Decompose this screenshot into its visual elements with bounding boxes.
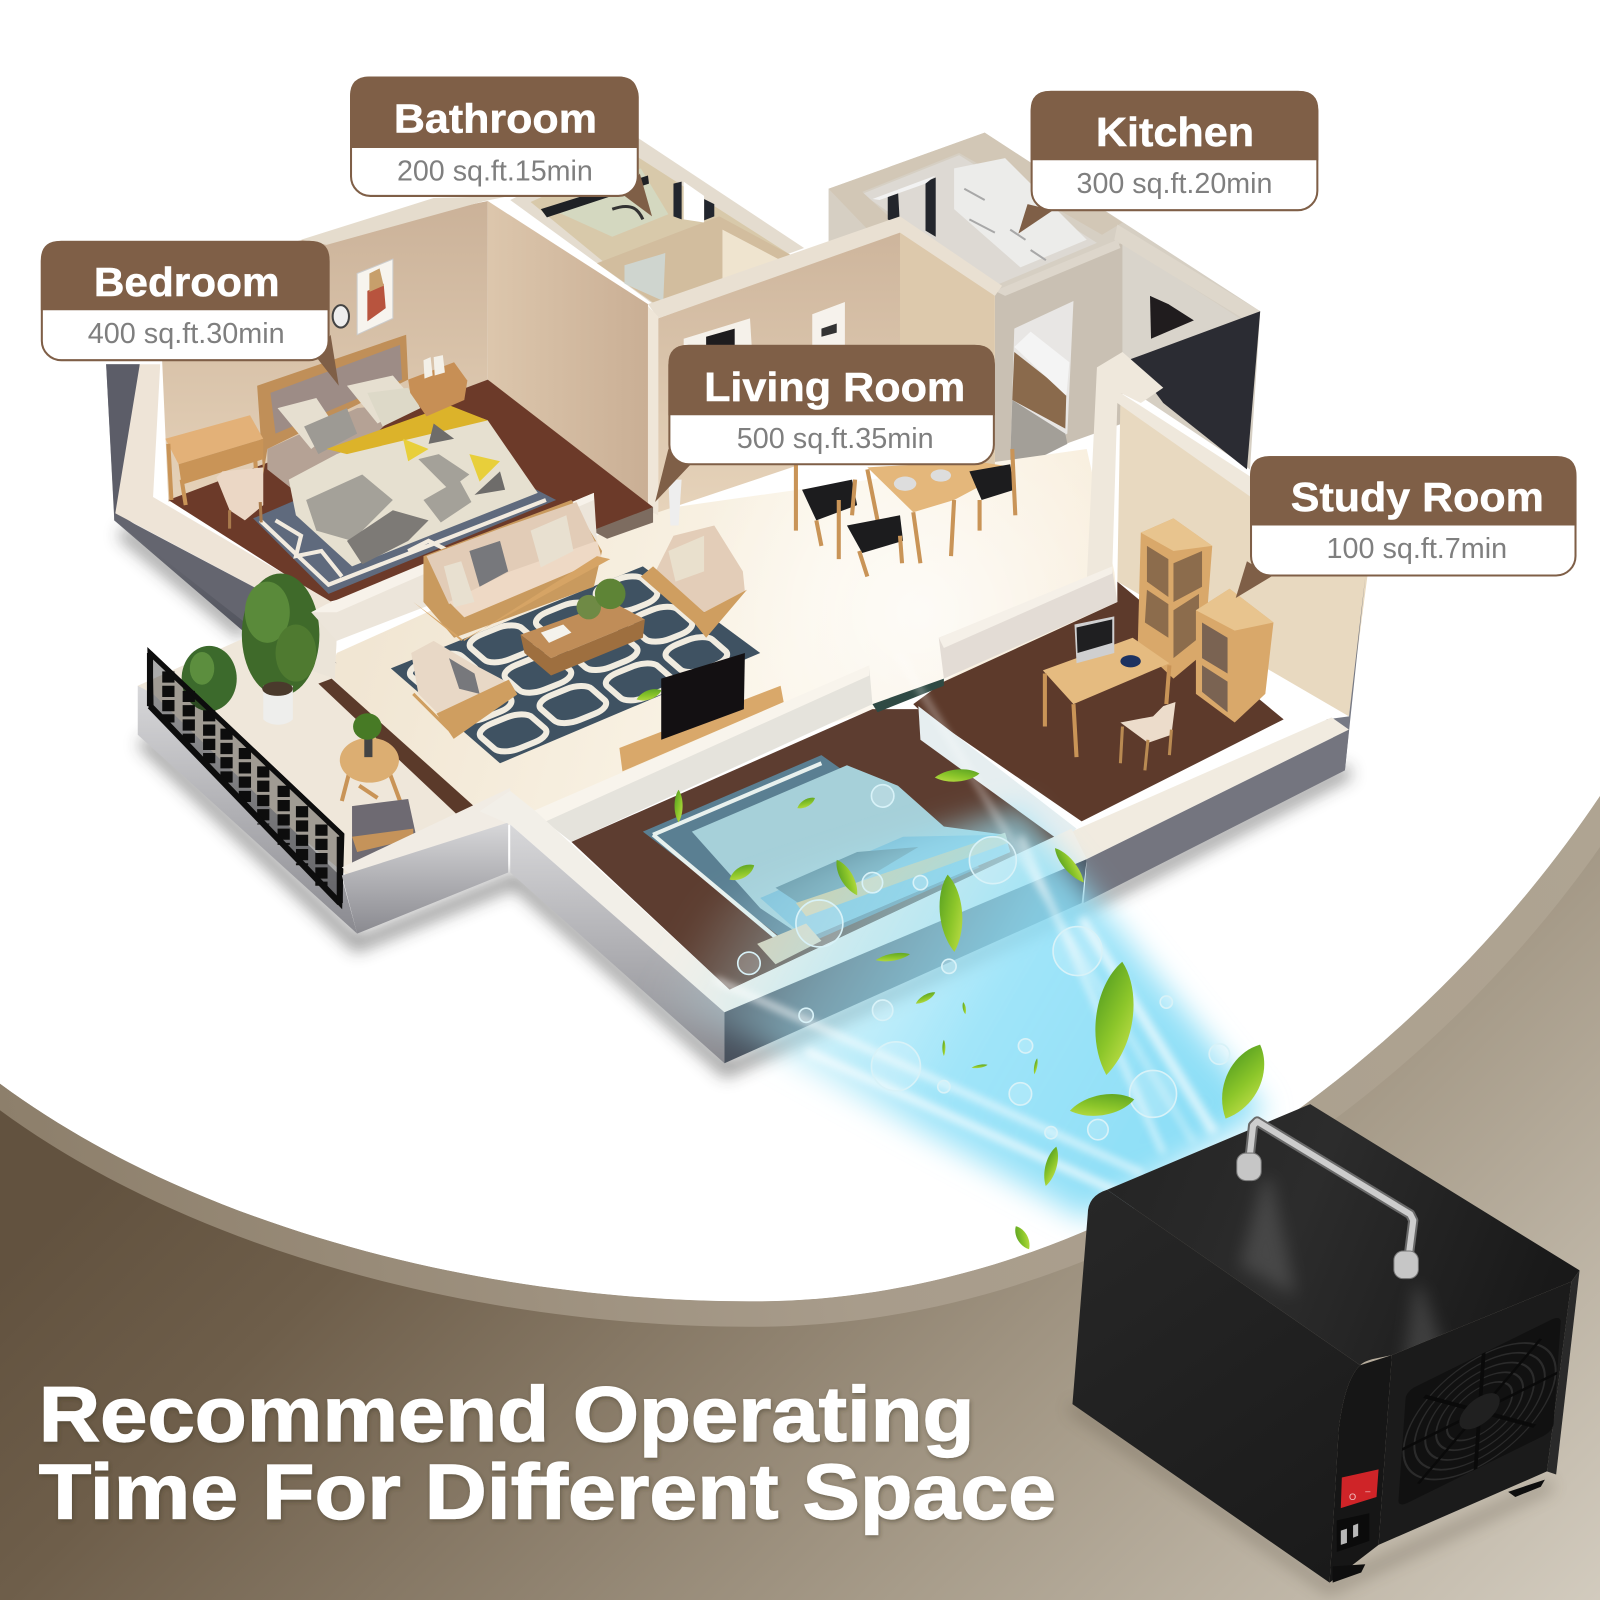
rug [643,755,980,949]
title: Recommend Operating [39,1372,974,1458]
label: kitchen: Kitchen [1096,109,1254,155]
left side [1072,1190,1360,1583]
ozone generator [1071,1104,1580,1588]
nightstand [408,362,467,416]
rug [253,439,556,594]
bed [257,335,538,566]
outer right wall [1327,577,1365,770]
device shadow [1071,1406,1551,1588]
label: kitchen: 300 sq.ft.20min [1077,168,1272,200]
plant vase [668,480,682,526]
rocker switch [1341,1469,1379,1508]
TV unit [619,653,784,771]
small plant [182,646,237,711]
air stream [683,686,1276,1234]
wall clock [333,305,349,328]
top highlights [1240,1179,1449,1367]
study room [913,352,1367,903]
label: study room: 100 sq.ft.7min [1327,533,1507,565]
bed [692,765,1010,939]
front walls [480,791,1087,1012]
armchair left [411,641,515,737]
front bedroom [480,665,1087,1063]
power socket [1337,1513,1369,1552]
label: study room: Study Room [1291,474,1544,520]
flying leaves [635,686,1276,1252]
front frame [1330,1355,1392,1583]
deer poster [357,259,393,335]
back wall [539,668,872,842]
round table [340,713,400,801]
kitchen doorway [1010,301,1073,464]
patio chair [352,799,416,865]
study wall [1117,400,1367,716]
label: bathroom: 200 sq.ft.15min [397,156,593,188]
label: living room: Living Room [704,364,965,410]
living room back walls [648,216,1002,515]
label: bathroom: Bathroom [394,96,597,142]
rocker switch: O [1349,1492,1356,1502]
study floor [913,582,1284,821]
front bedroom floor [571,709,1071,990]
label: living room: 500 sq.ft.35min [737,423,934,455]
coffee table [520,579,645,676]
balcony [138,573,510,934]
study chair [1120,702,1176,770]
floor plan model [106,133,1367,1069]
living rug [391,566,760,763]
fan plate [1379,1282,1571,1545]
desk [1043,616,1169,757]
bookshelf left [1138,518,1212,679]
label: kitchen [1018,91,1318,234]
title: Time For Different Space [39,1449,1056,1535]
nightstand [757,923,821,964]
stool chair [216,467,263,520]
picture: hat [812,302,845,347]
label: bedroom: 400 sq.ft.30min [88,318,285,350]
label: bathroom [350,77,652,216]
top [1107,1104,1580,1365]
divider stub [939,569,1117,679]
bathroom [510,138,804,304]
living room furniture [311,449,1015,771]
partition wall [311,493,597,641]
sofa [413,500,610,641]
label: bedroom [41,241,339,386]
back walls and kitchen block [829,133,1260,469]
armchair right [641,526,747,638]
dark exterior [1131,311,1260,469]
label: study room [1236,456,1577,598]
feet [1333,1480,1545,1583]
handle [1237,1121,1418,1279]
living floor [324,449,1117,816]
label: living room [655,345,995,502]
rocker switch: – [1365,1486,1371,1496]
label: bedroom: Bedroom [94,259,280,305]
bedroom [158,196,653,602]
bedroom walls [158,201,488,502]
fan grille [1398,1315,1561,1508]
dressing table [165,415,263,464]
bubbles [738,785,1230,1140]
dining set [796,449,1015,577]
bookshelf right [1196,589,1273,722]
railing [150,653,342,903]
outer left wall [106,364,337,663]
bedroom floor [168,380,653,602]
right stub [918,706,1077,842]
tree [242,573,319,725]
balcony front wall [342,788,510,880]
title [39,1372,1056,1535]
house ground shadow [122,531,1349,1069]
kitchen side wall [995,243,1122,469]
